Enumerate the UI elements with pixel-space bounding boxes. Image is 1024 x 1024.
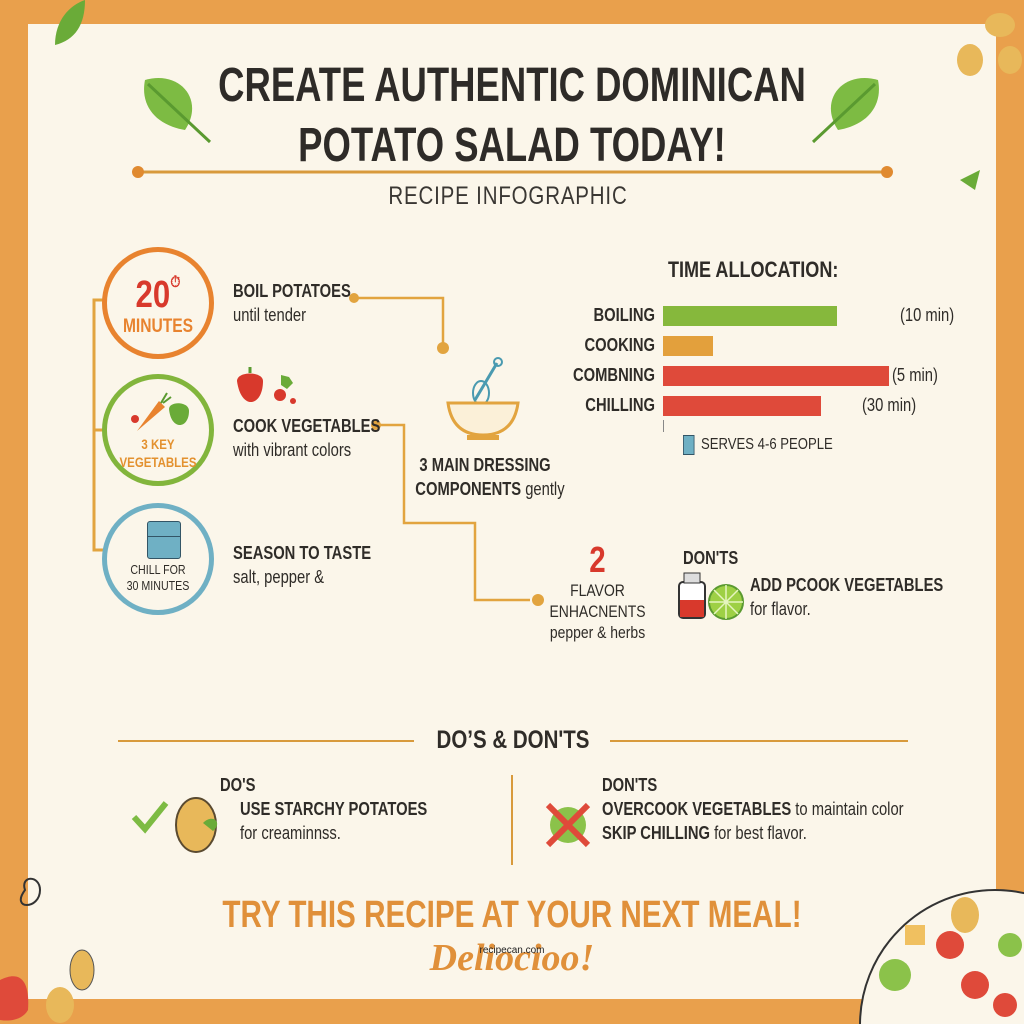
icon: fridge [147,521,181,559]
text: 2 flavor enhancements: pepper & herbs [550,623,645,642]
chart: time allocation: (30 min) [862,395,916,415]
icon: salt shaker and lime [678,572,744,620]
panel: donts: OVERCOOK VEGETABLES to maintain color [602,799,904,819]
panel: 20 minutes circle: 20⏱ [136,274,180,316]
icon: carrot and pepper [131,392,189,431]
icon: potato [175,797,218,853]
panel: chill circle: CHILL FOR [130,562,186,577]
divider vertical [511,775,513,865]
text: cook vegetables [233,416,380,460]
title [218,59,806,172]
bar: chilling: CHILLING [585,395,655,415]
title: POTATO SALAD TODAY! [298,119,726,172]
subtitle: RECIPE INFOGRAPHIC [388,182,628,210]
icon: checkmark [132,801,168,834]
icon: crossed vegetables [546,802,590,848]
decoration: top left leaf [55,0,85,45]
chart: time allocation [573,257,954,455]
text: add cook vegetables [750,575,943,619]
chart: time allocation: (10 min) [900,305,954,325]
panel: 20 minutes circle: MINUTES [123,316,193,337]
text: boil potatoes [233,281,351,325]
text: 2 flavor enhancements: ENHACNENTS [549,602,646,621]
chart title: TIME ALLOCATION: [668,257,838,282]
panel: dos: DO'S [220,775,256,795]
legend: serves: SERVES 4-6 PEOPLE [701,436,833,453]
panel: dos [132,775,427,853]
text: cook vegetables: COOK VEGETABLES [233,416,380,436]
panel: 20 minutes circle [102,247,214,359]
text: dressing components [415,455,565,499]
panel: 3 key vegetables circle [102,374,214,486]
icon: left leaf [144,78,211,144]
panel: dos: for creaminnss. [240,823,341,843]
panel: donts: DON'TS [602,775,657,795]
text: dressing components: 3 MAIN DRESSING [419,455,551,475]
text: donts small: DON'TS [683,548,738,568]
bar: cooking: COOKING [584,335,655,355]
panel: donts: SKIP CHILLING for best flavor. [602,823,807,843]
text: add cook vegetables: ADD PCOOK VEGETABLES [750,575,943,595]
text: dressing components: COMPONENTS gently [415,479,565,499]
panel: 3 key vegetables circle: VEGETABLES [120,454,196,470]
chart: time allocation: (5 min) [892,365,938,385]
bar: boiling: BOILING [594,305,655,325]
panel: chill circle [102,503,214,615]
icon: pepper & veg [237,367,296,404]
text: boil potatoes: until tender [233,305,306,325]
text: boil potatoes: BOIL POTATOES [233,281,351,301]
panel: 3 key vegetables circle: 3 KEY [141,436,175,452]
text: season to taste [233,543,371,587]
text: cook vegetables: with vibrant colors [233,440,351,460]
text: 2 flavor enhancements: FLAVOR [570,581,625,600]
text: season to taste: SEASON TO TASTE [233,543,371,563]
bar: combining: COMBNING [573,365,655,385]
divider with dots [132,166,893,178]
icon: right leaf [812,78,879,144]
panel: donts [546,775,904,848]
icon: bowl with whisk [446,357,520,440]
text: 2 flavor enhancements [549,539,646,642]
website: recipecan.com [479,945,545,956]
heading: dos and donts: DO’S & DON'TS [437,726,589,754]
title: CREATE AUTHENTIC DOMINICAN [218,59,806,112]
panel: chill circle: 30 MINUTES [127,578,189,593]
text: season to taste: salt, pepper & [233,567,324,587]
text: add cook vegetables: for flavor. [750,599,811,619]
panel: dos: USE STARCHY POTATOES [240,799,427,819]
decoration: pepper and potatoes bottom left [0,878,94,1023]
decoration: top right potatoes [957,13,1022,190]
signature: Deliocioo! [430,937,594,979]
decoration: salad plate bottom right [859,889,1024,1024]
text: 2 flavor enhancements: 2 [589,539,606,580]
call to action: TRY THIS RECIPE AT YOUR NEXT MEAL! [222,894,802,936]
